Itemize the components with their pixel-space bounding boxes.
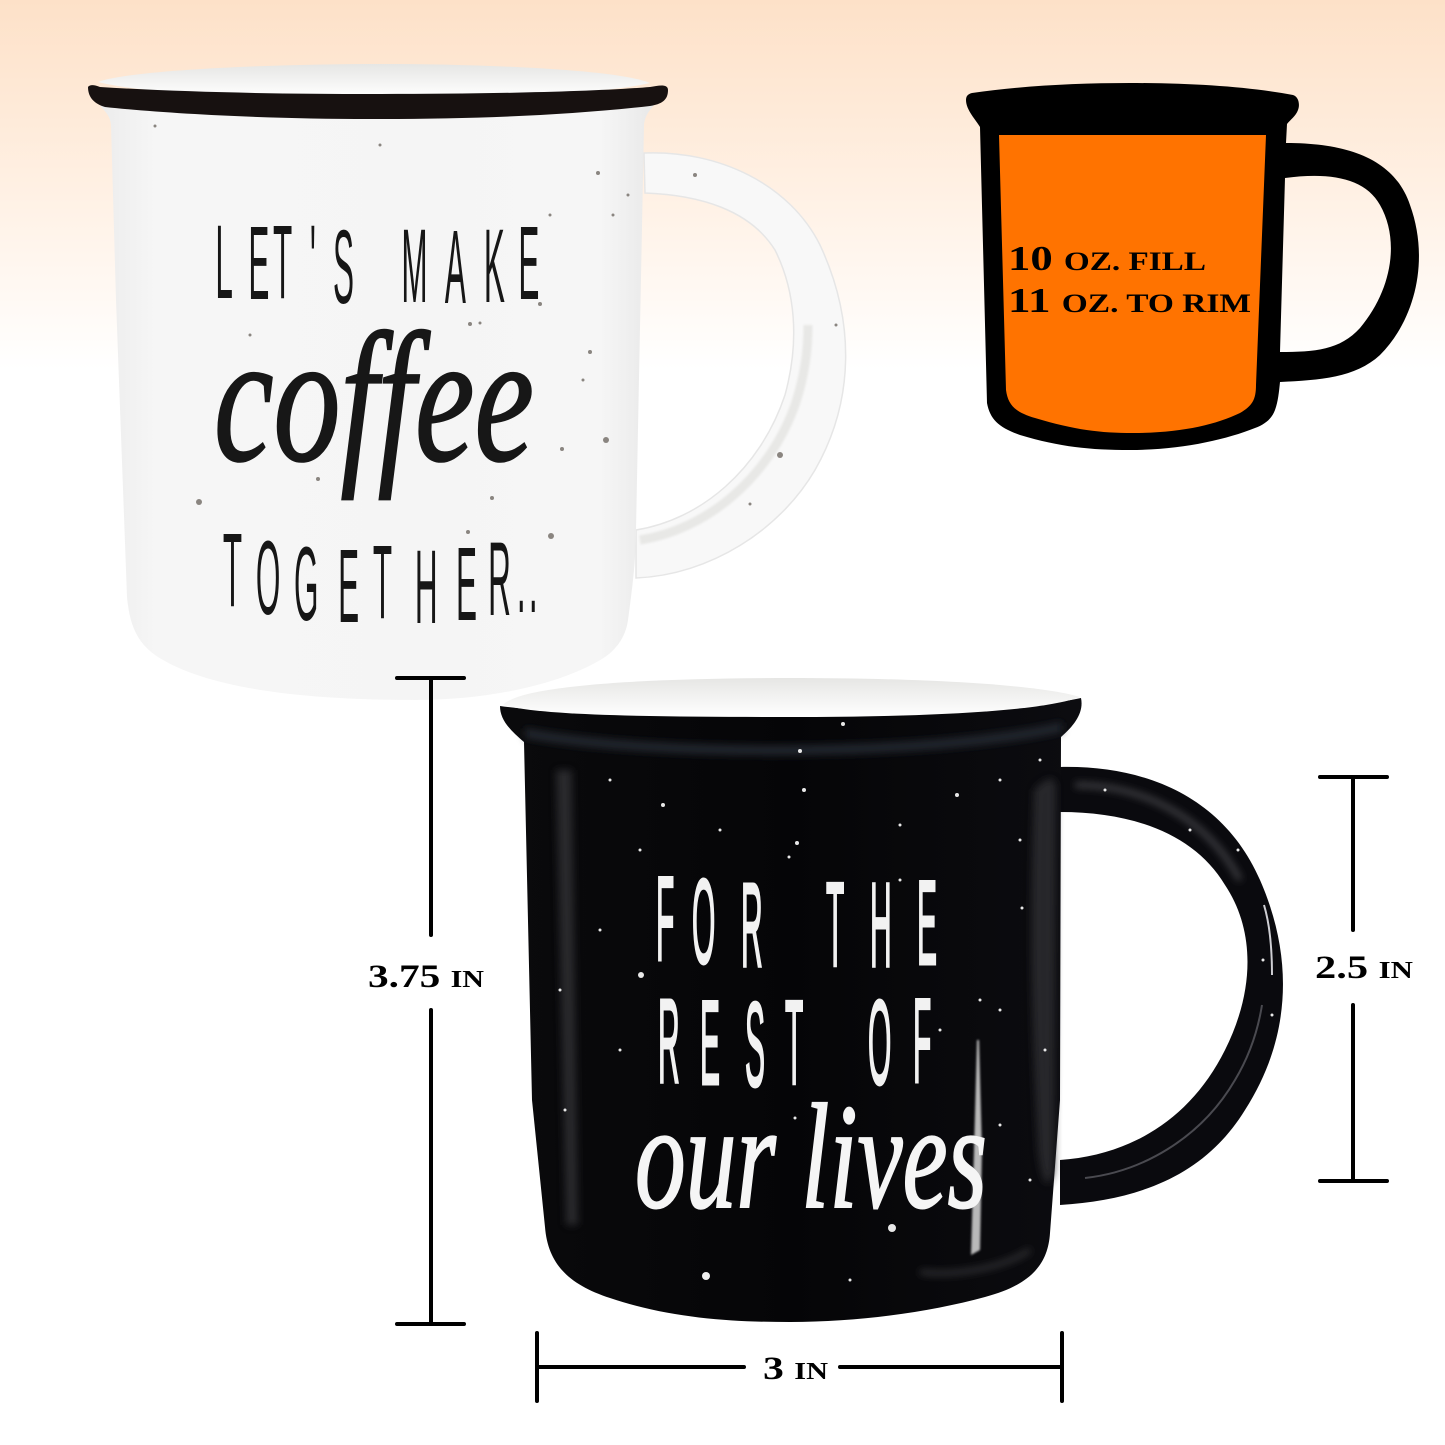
height dimension 3.75 in [368, 678, 485, 1324]
speckles on black mug [558, 722, 1274, 1282]
black mug text: rest of: REST OF [658, 974, 931, 1112]
white mug text: let's make: LET'S MAKE [215, 205, 539, 326]
label: 3 in: 3 IN [763, 1351, 829, 1387]
black mug text: for the: FOR THE [656, 852, 937, 992]
icon silhouette with handle [966, 83, 1419, 450]
white mug rim [88, 85, 668, 119]
black mug handle [1060, 767, 1283, 1205]
handle height dimension 2.5 in [1315, 777, 1414, 1181]
white mug handle [636, 153, 846, 578]
black mug body [500, 698, 1082, 1322]
capacity text: 10 oz. fill: 10 OZ. FILL [1008, 239, 1206, 278]
black mug interior [503, 678, 1080, 717]
background gradient [0, 0, 1445, 370]
white mug text: coffee: coffee [214, 296, 534, 501]
capacity mug icon [966, 83, 1419, 450]
white mug interior [98, 64, 650, 97]
width dimension 3 in [537, 1333, 1062, 1401]
black mug [500, 678, 1283, 1322]
black mug glossy highlights [525, 722, 1062, 1280]
capacity text: 11 oz. to rim: 11 OZ. TO RIM [1008, 281, 1251, 320]
black mug text: our lives: our lives [635, 1074, 987, 1240]
speckles on white mug [154, 124, 838, 539]
white mug text: together: TOGETHER.. [223, 513, 538, 646]
label: 3.75 in: 3.75 IN [368, 959, 485, 995]
white mug body [100, 104, 655, 700]
white mug [88, 64, 846, 700]
icon orange fill [999, 135, 1266, 433]
label: 2.5 in: 2.5 IN [1315, 950, 1414, 986]
